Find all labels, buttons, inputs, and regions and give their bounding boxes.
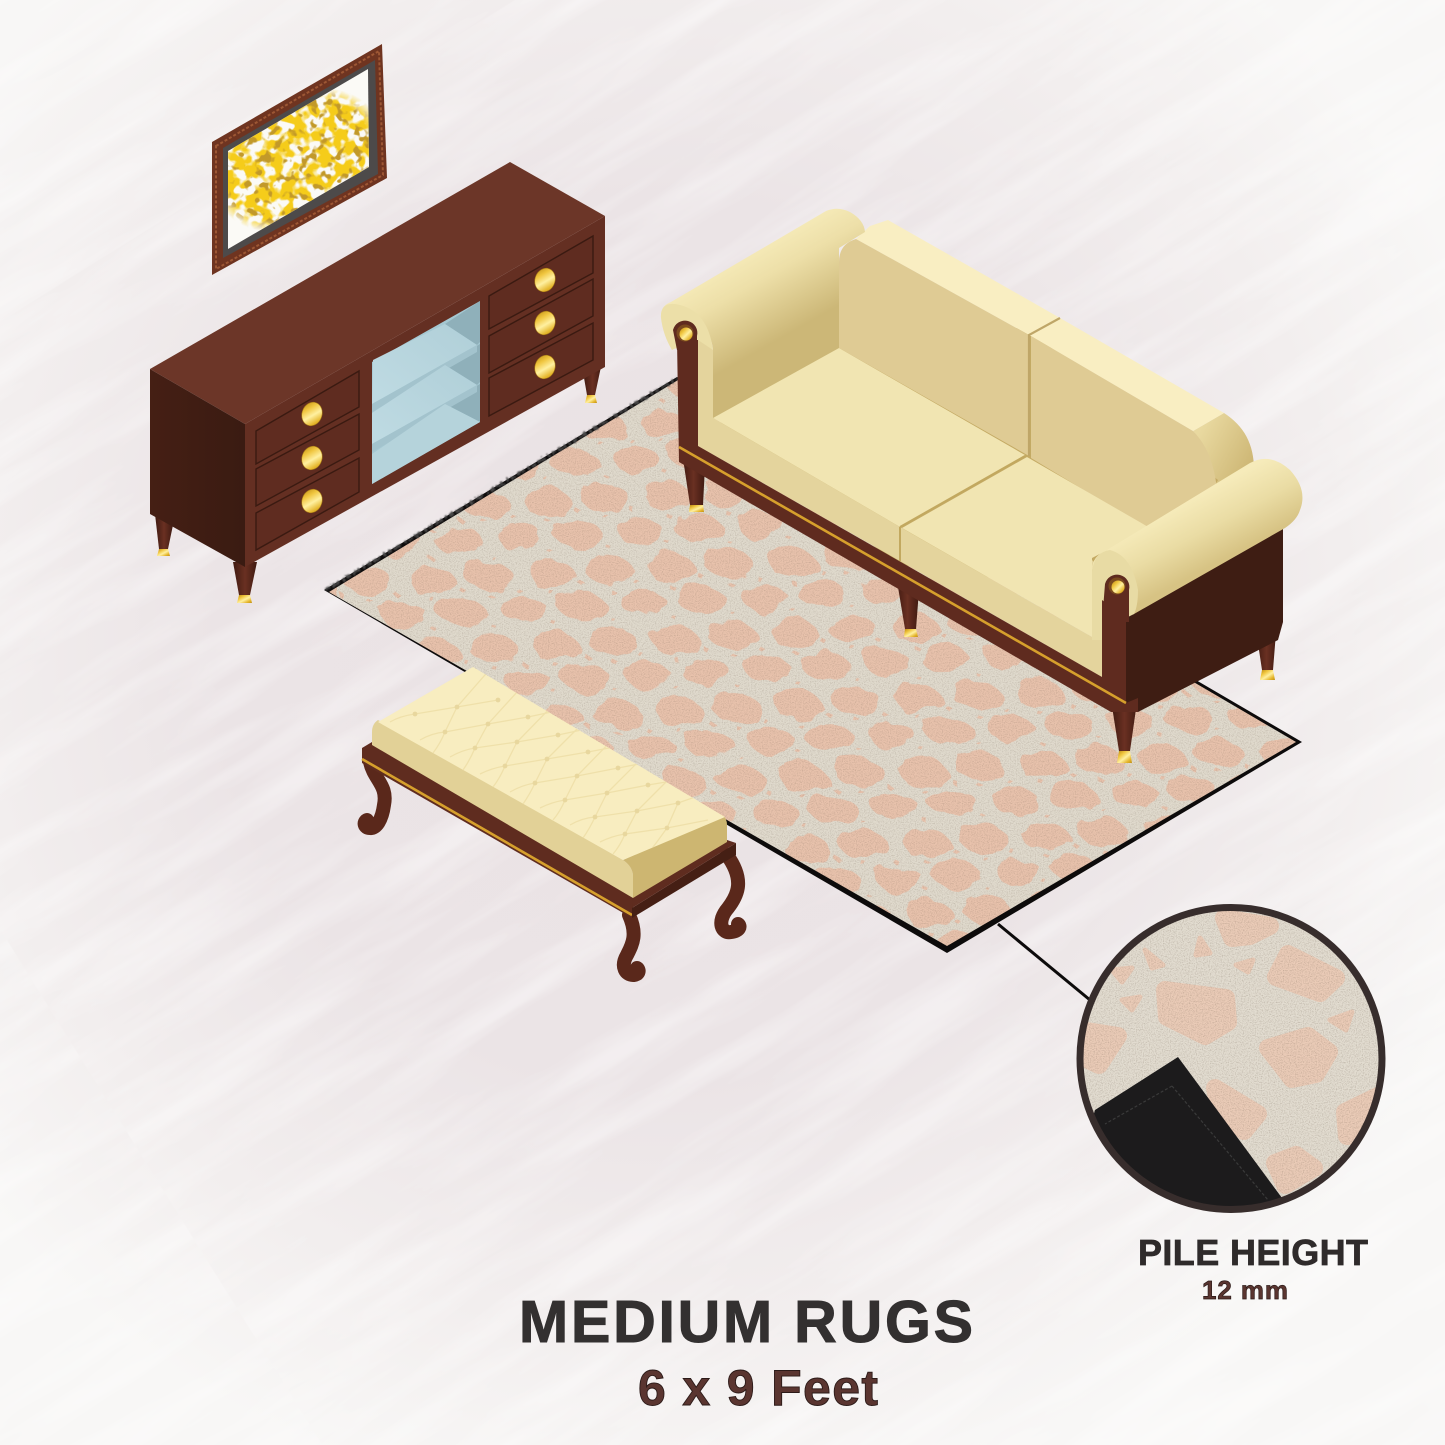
sofa right arm front	[1092, 550, 1138, 640]
sofa underlay seams	[713, 300, 1218, 600]
gold knobs	[298, 265, 559, 516]
rug face with lattice pattern	[329, 380, 1296, 946]
rug: 6 x 9 feet patterned rug	[324, 376, 1302, 953]
sofa back seams	[1029, 318, 1060, 456]
picture gold brush strokes	[228, 90, 369, 230]
bench front leg	[624, 915, 639, 975]
bench frame side	[632, 843, 736, 918]
sofa right arm roll	[1092, 459, 1302, 615]
sofa back end curve	[1193, 413, 1254, 520]
sofa seat left top	[713, 348, 1025, 527]
sofa seat front right	[900, 527, 1102, 677]
label: 12 mm: 12 mm	[1202, 1275, 1288, 1305]
magnified peach pattern	[1078, 918, 1380, 1185]
bench frame front	[362, 742, 633, 918]
rug worn top edge	[326, 378, 678, 590]
callout leader line	[998, 924, 1090, 1000]
lens grain texture	[1084, 911, 1378, 1196]
sofa right arm scroll cap	[1102, 575, 1129, 622]
sideboard: brown media cabinet	[150, 162, 605, 603]
sofa seat seams	[900, 456, 1025, 561]
subtitle: 6 x 9 feet: 6 x 9 Feet	[638, 1360, 878, 1416]
sofa left arm roll	[661, 209, 865, 420]
sofa right back cushion	[1031, 336, 1218, 530]
bench tufting	[390, 674, 708, 854]
bench back leg left	[365, 762, 385, 828]
magnifier: rug pile close-up	[1076, 904, 1386, 1213]
label: pile height: PILE HEIGHT	[1138, 1232, 1368, 1273]
lens ring	[1080, 908, 1382, 1210]
bench: tufted cream ottoman	[362, 660, 740, 975]
sofa wood side panel	[1126, 525, 1283, 712]
cabinet left side	[150, 369, 245, 567]
wall picture: framed abstract gold art	[212, 44, 387, 275]
rug backing black edge	[324, 377, 1302, 953]
black rug backing corner	[1094, 1057, 1282, 1206]
sofa back top ridge	[856, 220, 1224, 431]
bench cushion top	[378, 667, 725, 860]
sofa left arm scroll cap	[673, 321, 697, 350]
cabinet legs	[155, 362, 602, 603]
cabinet front	[245, 216, 605, 567]
sofa gold trim stripe	[679, 447, 1126, 703]
bench cushion side	[623, 815, 727, 898]
drawers left	[256, 371, 359, 550]
title: medium rugs: MEDIUM RUGS	[519, 1289, 973, 1355]
sofa legs	[682, 452, 1277, 763]
bench cushion front	[372, 720, 633, 898]
sofa wood front rail and posts	[677, 340, 1138, 712]
bench gold stripe	[362, 759, 632, 915]
bench back leg right	[721, 855, 740, 932]
sofa: cream two seat sofa with wood frame	[661, 209, 1302, 763]
sofa left back cushion	[839, 239, 1029, 456]
glass shelf unit	[372, 301, 480, 484]
drawers right	[489, 236, 593, 416]
sofa seat front left	[698, 340, 900, 561]
cabinet top	[150, 162, 605, 424]
sofa left arm front scroll	[661, 304, 713, 446]
sofa seat right top	[902, 457, 1150, 637]
